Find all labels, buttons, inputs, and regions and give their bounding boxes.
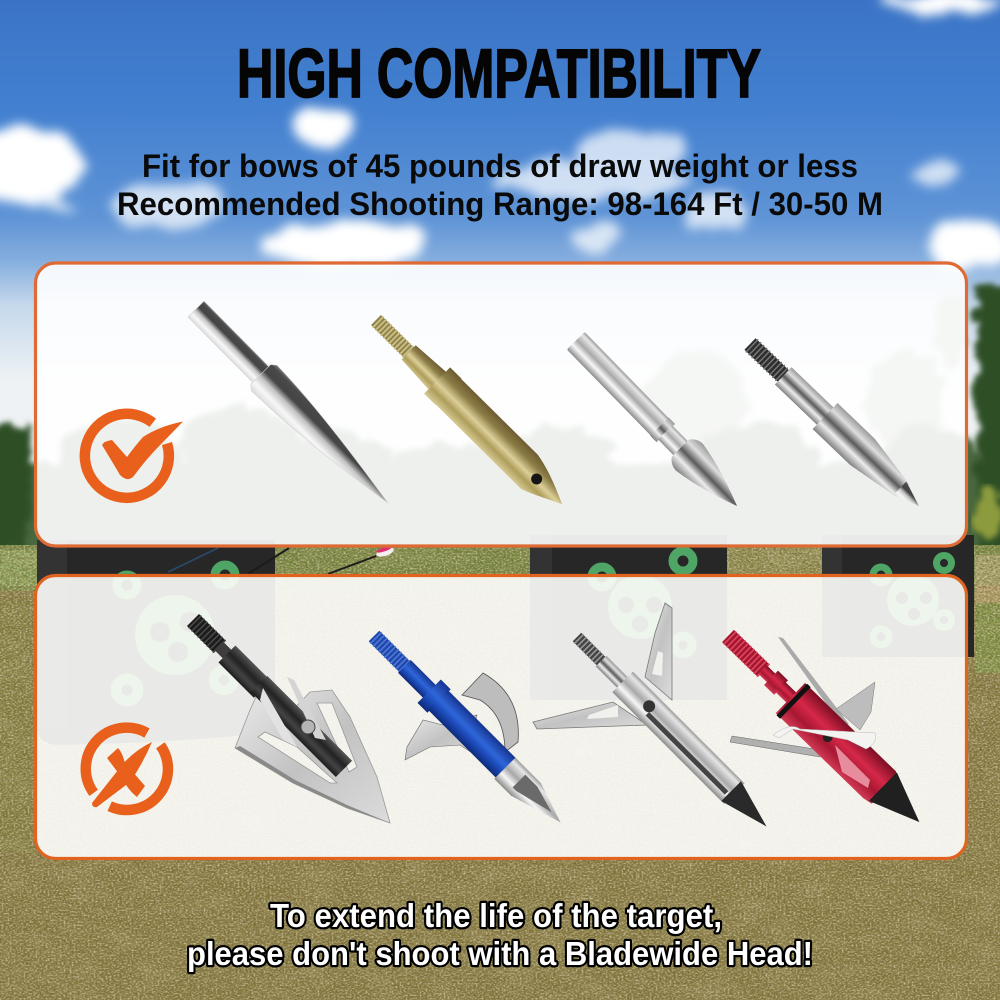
- footer line two: please don't shoot with a Bladewide Head!: [187, 935, 813, 972]
- footer warning: [187, 897, 813, 972]
- distant tall trees: [643, 290, 964, 450]
- shooting range line: Recommended Shooting Range: 98-164 Ft / 30-50 M: [117, 186, 883, 222]
- icon: cross mark: [86, 728, 168, 810]
- title: HIGH COMPATIBILITY: [237, 35, 761, 112]
- footer line one: To extend the life of the target,: [270, 897, 722, 934]
- flying arrows: [168, 545, 395, 574]
- arrowhead: blue broadhead: [362, 624, 572, 834]
- side trees: [0, 285, 1000, 550]
- panel: incompatible broadheads: [36, 576, 966, 858]
- arrowhead: silver bullet point: [183, 296, 401, 516]
- arrowhead: brass threaded point: [363, 307, 575, 517]
- bright foliage at right edge: [974, 489, 1000, 541]
- draw weight line: Fit for bows of 45 pounds of draw weight or less: [142, 148, 858, 184]
- panel: compatible field points: [36, 263, 966, 546]
- arrowhead: threaded steel point: [738, 331, 931, 519]
- arrowhead: steel target point: [562, 327, 751, 519]
- subtitle: [117, 148, 883, 222]
- tree line: [0, 407, 1000, 557]
- arrowhead: silver expandable broadhead: [533, 603, 777, 836]
- vent hole: [529, 471, 544, 487]
- clouds: [0, 0, 1000, 270]
- arrowhead: black fixed broadhead: [185, 611, 390, 823]
- archery targets: [37, 535, 974, 745]
- icon: check mark: [85, 414, 183, 498]
- arrowhead: red expandable broadhead: [712, 621, 934, 839]
- ground: [0, 545, 1000, 1000]
